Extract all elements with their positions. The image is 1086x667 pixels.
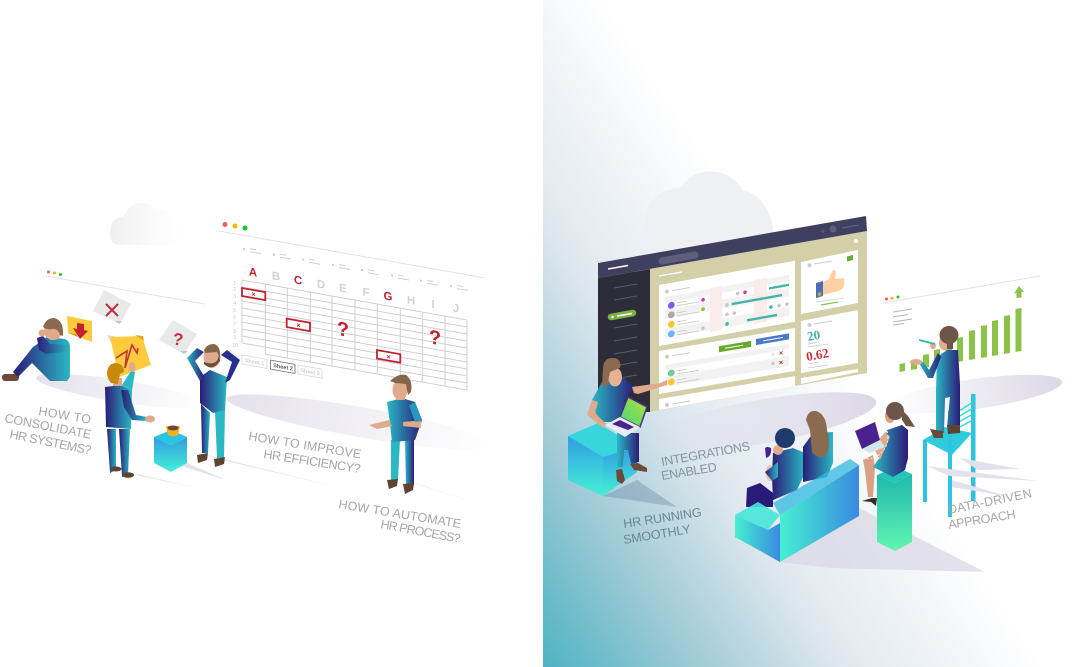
couch shadow xyxy=(780,508,985,572)
card: integrations list: × xyxy=(779,359,783,367)
cell crosses: × xyxy=(296,322,301,330)
cloud xyxy=(110,203,183,245)
chair xyxy=(923,394,976,517)
browser chart window xyxy=(883,276,1040,325)
caption: data-driven approach xyxy=(947,486,1033,532)
up arrow xyxy=(1014,286,1024,298)
column labels: C xyxy=(294,274,303,288)
note: down arrow xyxy=(67,316,92,342)
person: woman on pillar xyxy=(844,402,915,506)
flagged cells xyxy=(242,288,400,363)
caption: how to consolidate: HR SYSTEMS? xyxy=(8,427,93,457)
caption: hr running smoothly xyxy=(622,505,703,547)
row numbers xyxy=(232,281,238,349)
column labels: I xyxy=(431,299,435,311)
caption: data-driven approach: DATA-DRIVEN xyxy=(947,486,1033,517)
column labels: E xyxy=(339,282,347,296)
group: solution scene xyxy=(568,171,1064,572)
small browser window line xyxy=(45,270,205,304)
caption: integrations enabled xyxy=(660,439,751,483)
caption: how to improve xyxy=(248,429,362,476)
ground shadows xyxy=(133,454,477,503)
card: integrations list: × xyxy=(779,350,783,358)
row numbers: 9 xyxy=(233,335,236,341)
caption: how to automate: HR PROCESS? xyxy=(379,517,462,546)
card: small lower right xyxy=(801,369,858,384)
caption: integrations enabled: ENABLED xyxy=(660,460,718,483)
question marks: ? xyxy=(429,326,441,350)
cell crosses xyxy=(251,291,391,361)
group: problems scene xyxy=(2,203,496,546)
card: lower list xyxy=(659,376,795,410)
caption: how to improve: HOW TO IMPROVE xyxy=(248,429,362,461)
ground shadows under chair xyxy=(927,458,1038,497)
row numbers: 6 xyxy=(233,315,236,321)
caption: hr running smoothly: SMOOTHLY xyxy=(622,522,692,547)
note: question mark xyxy=(159,320,197,354)
floor shadow right xyxy=(886,367,1064,421)
metric 20: 20 xyxy=(806,327,821,344)
toolbar xyxy=(243,247,468,291)
person: man on chair with chart xyxy=(883,276,1040,517)
pillar seat xyxy=(877,467,912,551)
spreadsheet window xyxy=(219,222,485,404)
column labels: G xyxy=(384,290,392,304)
sheet tabs: Sheet 2 xyxy=(273,363,293,373)
caption: how to automate xyxy=(338,497,462,546)
caption: how to automate: HOW TO AUTOMATE xyxy=(338,497,462,531)
cube seat xyxy=(568,423,637,496)
person: bearded holding head xyxy=(187,344,240,467)
caption: how to improve: HR EFFICIENCY? xyxy=(263,447,362,476)
person: blonde raising hand xyxy=(105,362,155,478)
row numbers: 10 xyxy=(232,343,238,349)
row numbers: 7 xyxy=(233,322,236,328)
floor shadow under dashboard xyxy=(640,380,880,464)
row numbers: 8 xyxy=(233,329,236,335)
caption: how to consolidate: CONSOLIDATE xyxy=(3,411,92,442)
cell crosses: × xyxy=(251,291,256,299)
person: man on couch xyxy=(746,428,805,507)
card: thumbs up xyxy=(801,250,858,314)
question marks: ? xyxy=(337,318,349,342)
card: people timeline xyxy=(659,261,795,346)
column labels: F xyxy=(362,287,370,300)
cell crosses: × xyxy=(386,354,391,361)
caption: how to consolidate: HOW TO xyxy=(38,404,92,427)
right panel background xyxy=(543,0,1086,667)
column labels xyxy=(249,266,459,316)
row numbers: 2 xyxy=(233,287,236,293)
caption: hr running smoothly: HR RUNNING xyxy=(622,505,703,531)
person: teal shirt standing xyxy=(369,375,422,494)
metric 0.62: 0.62 xyxy=(805,345,830,364)
note: red cross xyxy=(93,290,131,324)
card: integrations list xyxy=(659,328,795,394)
column labels: D xyxy=(317,278,325,292)
column labels: J xyxy=(453,303,459,316)
blue cube with cup xyxy=(154,426,187,472)
card: metrics xyxy=(801,310,858,373)
screen canvas xyxy=(650,231,867,412)
dashboard xyxy=(598,216,867,412)
column labels: A xyxy=(249,266,258,280)
person: seated with head in hands xyxy=(2,318,70,381)
column labels: H xyxy=(407,294,415,308)
caption: data-driven approach: APPROACH xyxy=(947,507,1017,532)
floor shadow left xyxy=(34,367,206,415)
note: falling chart xyxy=(107,335,151,377)
row numbers: 4 xyxy=(233,301,236,307)
person: woman with laptop xyxy=(587,358,667,484)
floor shadow right xyxy=(224,384,496,460)
caption: integrations enabled: INTEGRATIONS xyxy=(660,439,751,469)
caption: how to consolidate xyxy=(3,404,93,457)
row numbers: 3 xyxy=(233,294,236,300)
cube shadow xyxy=(603,480,677,507)
bar chart xyxy=(900,308,1022,372)
row numbers: 5 xyxy=(233,308,236,314)
row numbers: 1 xyxy=(233,281,236,287)
cloud behind dashboard xyxy=(645,171,775,265)
spreadsheet grid xyxy=(242,265,467,404)
couch xyxy=(735,459,859,562)
top bar xyxy=(598,216,867,278)
note: question mark: ? xyxy=(172,329,185,350)
sidebar xyxy=(598,269,650,412)
person: woman on couch xyxy=(803,411,833,482)
column labels: B xyxy=(272,270,280,284)
sheet tabs: Sheet 1 xyxy=(245,358,264,367)
sheet tabs xyxy=(242,355,322,378)
question marks xyxy=(337,310,441,358)
sheet tabs: Sheet 3 xyxy=(300,368,320,377)
